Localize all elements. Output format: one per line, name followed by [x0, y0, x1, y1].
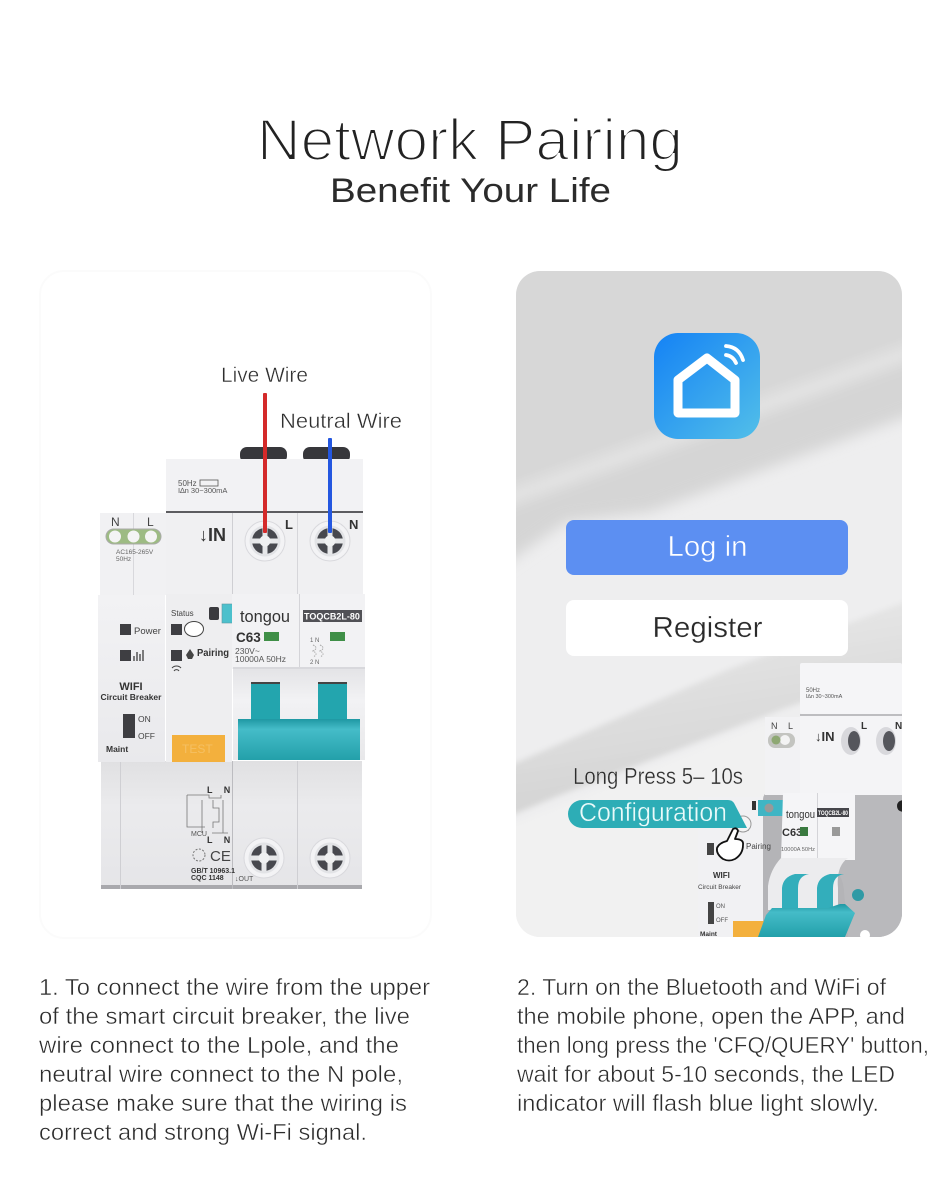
- text block: step 2: indicator will flash blue light slowly.: [517, 1090, 879, 1116]
- status module front: Status: [171, 609, 194, 618]
- text block: step 1: of the smart circuit breaker, the live: [39, 1003, 410, 1029]
- breaker front panels: 1 N: [310, 638, 319, 644]
- power terminal module: 50Hz: [116, 556, 131, 563]
- text block: step 2: [516, 974, 929, 1116]
- panel: wiring diagram: [40, 271, 431, 938]
- upper terminal block: L: [285, 517, 293, 532]
- status module front: Pairing: [197, 648, 229, 659]
- long press label: Long Press 5– 10s: [573, 763, 743, 789]
- title: Network Pairing: [257, 108, 683, 173]
- test button: TEST: [182, 742, 213, 756]
- right device illustration: [698, 663, 905, 940]
- wifi module: Circuit Breaker: [698, 884, 742, 891]
- subtitle: Benefit Your Life: [330, 172, 611, 210]
- label: live wire: Live Wire: [221, 363, 308, 387]
- upper terminal block: N: [349, 517, 358, 532]
- wifi module: ON: [716, 904, 725, 910]
- teal pivot: [852, 889, 864, 901]
- text block: step 1: 1. To connect the wire from the upper: [39, 974, 430, 1000]
- lower body: CQC 1148: [191, 875, 224, 882]
- breaker fronts: [768, 793, 855, 910]
- upper terminals: N: [895, 721, 902, 732]
- wifi module: Pairing: [746, 842, 771, 851]
- app icon: [654, 333, 760, 439]
- teal handles: [238, 682, 360, 760]
- breaker fronts: TOQCB2L-80: [818, 810, 848, 817]
- lower body: L: [207, 835, 213, 845]
- breaker fronts: 10000A 50Hz: [781, 847, 816, 853]
- top cover: [166, 459, 363, 513]
- label: neutral wire: Neutral Wire: [280, 409, 402, 433]
- power terminal module: [100, 513, 166, 595]
- top cover: I∆n 30~300mA: [806, 694, 843, 700]
- teal lever: [758, 904, 855, 937]
- breaker front panels: TOQCB2L-80: [304, 612, 360, 622]
- lower body: GB/T 10963.1: [191, 868, 235, 875]
- upper terminals: N: [771, 721, 778, 731]
- breaker front panels: tongou: [240, 607, 290, 626]
- lower body: L: [207, 785, 213, 795]
- gray housing: [763, 792, 902, 937]
- breaker fronts: tongou: [786, 809, 815, 821]
- red live wire: [263, 393, 267, 533]
- black terminals: [240, 447, 350, 463]
- upper terminal block: [166, 513, 363, 595]
- lower body: ↓OUT: [235, 876, 254, 883]
- blue neutral wire: [328, 438, 332, 533]
- lower body: [101, 761, 362, 889]
- status module front: [166, 594, 234, 762]
- register button: Register: [652, 612, 763, 644]
- lower body: MCU: [191, 831, 207, 838]
- text block: step 1: [38, 974, 430, 1145]
- wifi module: Maint: [700, 931, 718, 938]
- configuration callout: Configuration: [579, 799, 727, 827]
- text block: step 1: neutral wire connect to the N pole,: [39, 1061, 403, 1087]
- text block: step 2: 2. Turn on the Bluetooth and WiFi of: [517, 974, 887, 1000]
- wifi module front: [98, 595, 165, 762]
- text block: step 2: the mobile phone, open the APP, and: [517, 1003, 905, 1029]
- wifi module front: OFF: [138, 731, 155, 741]
- upper terminals: L: [788, 721, 793, 731]
- breaker front panels: [232, 594, 365, 760]
- wifi module front: ON: [138, 714, 151, 724]
- icon: pointing hand: [717, 828, 743, 860]
- register button: [566, 600, 848, 656]
- wifi module: WIFI: [713, 871, 730, 880]
- power terminal module: AC165-265V: [116, 549, 154, 556]
- lower body: N: [224, 835, 230, 845]
- upper terminals: L: [861, 721, 867, 732]
- test button: [172, 735, 225, 762]
- wifi module: [698, 797, 784, 938]
- wifi module front: WIFI: [119, 681, 143, 693]
- wifi module: OFF: [716, 918, 728, 924]
- breaker front panels: 2 N: [310, 660, 319, 666]
- panel: app pairing: [516, 271, 902, 937]
- wifi module front: Maint: [106, 744, 128, 754]
- power terminal module: N: [111, 515, 120, 529]
- upper terminals: [765, 716, 902, 795]
- breaker front panels: 10000A 50Hz: [235, 654, 286, 664]
- wifi module front: Power: [134, 626, 161, 637]
- text block: step 2: then long press the 'CFQ/QUERY' button,: [517, 1032, 929, 1058]
- wifi module: Status: [732, 827, 749, 833]
- wifi module front: Circuit Breaker: [101, 692, 162, 702]
- text block: step 1: wire connect to the Lpole, and the: [38, 1032, 399, 1058]
- login button: [566, 520, 848, 575]
- breaker front panels: 230V~: [235, 646, 260, 656]
- lower body: N: [224, 785, 230, 795]
- upper terminals: ↓IN: [815, 729, 834, 744]
- login button: Log in: [668, 531, 748, 563]
- top cover: [800, 663, 902, 716]
- power terminal module: L: [147, 515, 154, 529]
- text block: step 1: please make sure that the wiring is: [39, 1090, 407, 1116]
- breaker fronts: C63: [782, 827, 802, 839]
- text block: step 2: wait for about 5-10 seconds, the LED: [516, 1061, 895, 1087]
- text block: step 1: correct and strong Wi-Fi signal.: [39, 1119, 367, 1145]
- breaker front panels: C63: [236, 630, 261, 645]
- upper terminal block: ↓IN: [199, 525, 226, 545]
- top cover: 50Hz: [806, 688, 820, 694]
- top cover: 50Hz: [178, 479, 197, 488]
- lower body: CE: [210, 848, 231, 865]
- top cover: I∆n 30~300mA: [178, 486, 227, 495]
- circuit breaker device: [98, 447, 365, 889]
